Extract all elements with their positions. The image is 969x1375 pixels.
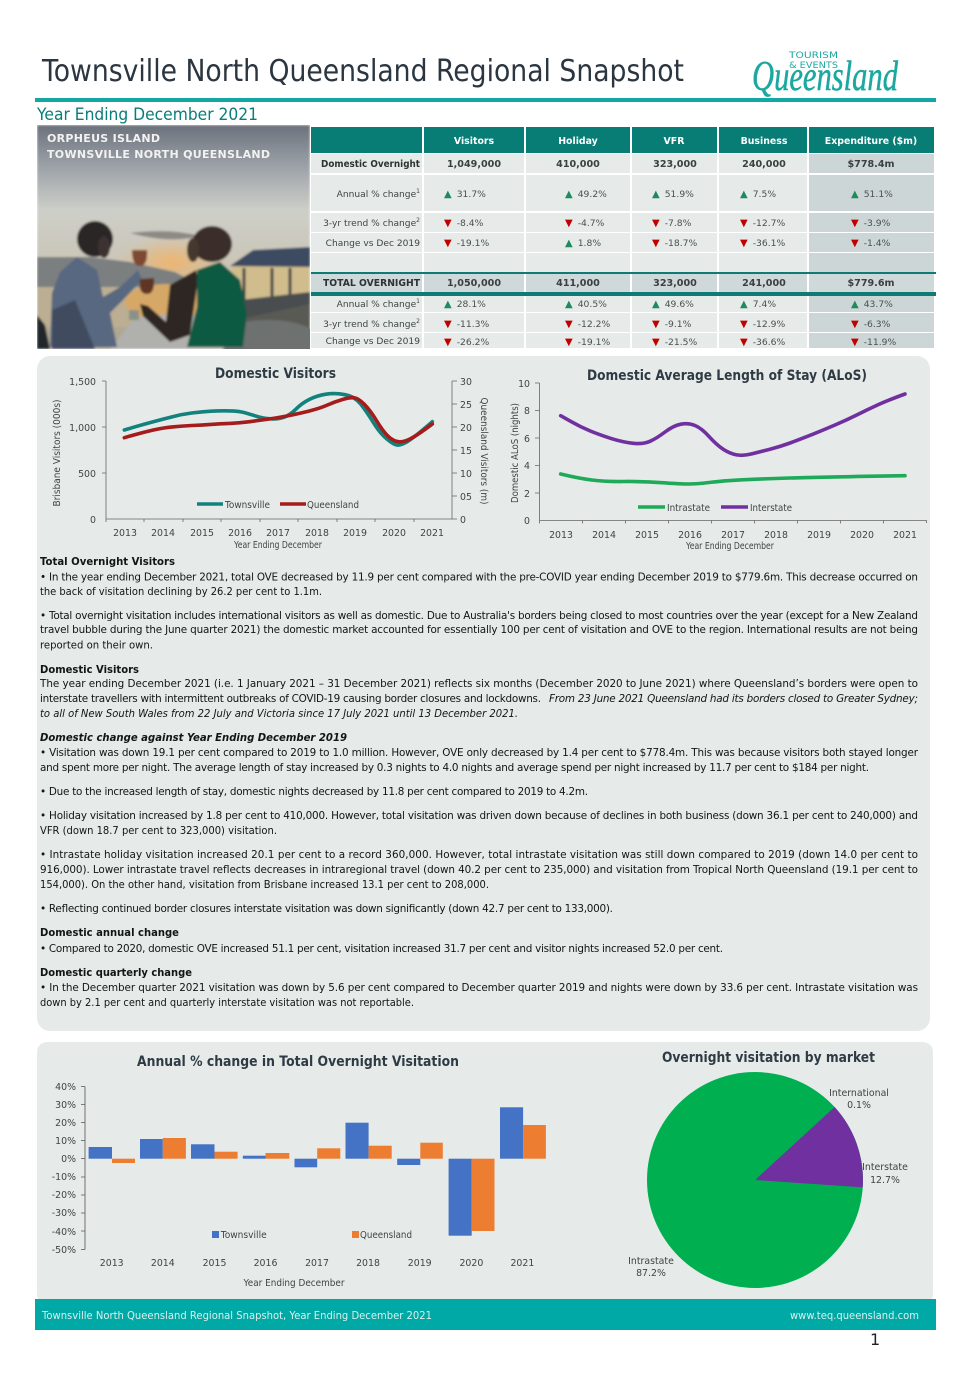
table cell backgrounds <box>311 154 934 348</box>
row: Domestic change vs Dec 2019 <box>326 238 891 249</box>
text block: Domestic change against Year Ending December 2019: VFR (down 18.7 per cent to 323,000) visitation. <box>40 825 277 837</box>
row: Total 3-yr trend: ▼ -11.3% <box>444 319 489 330</box>
line chart: Domestic Average Length of Stay <box>510 368 926 552</box>
line chart: Domestic Visitors: 05 <box>460 492 472 503</box>
text block: Total Overnight Visitors: • In the year ending December 2021, total OVE decreased by 11.9 per cent compared with the pre-COVID year ending December 2019 to $779.6m. This decrease occurred on <box>40 572 918 584</box>
pie labels: International <box>829 1088 889 1099</box>
bar chart: Annual % change in Total Overnight Visitation: 2021 <box>510 1258 534 1269</box>
row: Total annual % change: ▲ 49.6% <box>652 299 694 310</box>
row: Total change vs Dec 2019: ▼ -36.6% <box>740 337 785 348</box>
row: Domestic 3-yr trend: ▼ -7.8% <box>652 218 692 229</box>
row: Domestic annual % change: ▲ 31.7% <box>444 189 486 200</box>
line chart: Domestic Visitors: 20 <box>460 423 472 434</box>
line chart: Domestic Average Length of Stay: Year Ending December <box>685 541 774 552</box>
pie labels: Interstate <box>862 1162 908 1173</box>
panel: charts and commentary <box>37 356 930 1031</box>
line chart: Domestic Visitors: 500 <box>78 469 96 480</box>
text block: Total Overnight Visitors: the back of visitation declining by 26.2 per cent to 1.1m. <box>40 586 322 598</box>
row: Total change vs Dec 2019: Change vs Dec 2019 <box>326 337 420 347</box>
pie labels <box>628 1088 908 1279</box>
logo: Tourism & Events Queensland: & EVENTS <box>789 61 838 71</box>
text block: Domestic Visitors: The year ending December 2021 (i.e. 1 January 2021 – 31 December 2021) reflects six months (December 2020 to June 2021) where Queensland’s borders were open to <box>39 678 918 690</box>
line chart: Domestic Average Length of Stay: 10 <box>518 379 530 390</box>
text block: Total Overnight Visitors <box>40 556 918 652</box>
bar chart: Annual % change in Total Overnight Visitation: 2015 <box>203 1258 226 1269</box>
row: Total Overnight: 411,000 <box>556 278 600 289</box>
legend <box>638 503 792 514</box>
text block: Total Overnight Visitors: • Total overnight visitation includes international visitors as well as domestic. Due to Australia's borders being closed to most countries over the year (except for a New Zealand <box>40 610 918 622</box>
bar chart: Annual % change in Total Overnight Visitation: -20% <box>52 1190 76 1201</box>
bar chart: Annual % change in Total Overnight Visitation: -30% <box>52 1208 76 1219</box>
row: Total Overnight: 241,000 <box>742 278 786 289</box>
line chart: Domestic Visitors: 2016 <box>228 528 252 539</box>
row: Domestic Overnight: 240,000 <box>742 159 786 170</box>
line chart: Domestic Visitors: 1,000 <box>69 423 96 434</box>
line chart: Domestic Average Length of Stay: 2013 <box>549 530 573 541</box>
bar chart: Annual % change in Total Overnight Visitation: 2018 <box>356 1258 380 1269</box>
row: Total change vs Dec 2019 <box>326 337 896 348</box>
row: Total Overnight <box>323 278 895 289</box>
footer bar: www.teq.queensland.com <box>790 1310 919 1322</box>
text block: Domestic Visitors <box>39 664 918 720</box>
photo caption: ORPHEUS ISLAND <box>47 132 160 145</box>
row: Total 3-yr trend <box>323 318 891 330</box>
row: Total annual % change: 1 <box>416 298 420 305</box>
line chart: Domestic Visitors: 10 <box>460 469 472 480</box>
line chart: Domestic Visitors: 2014 <box>151 528 175 539</box>
photo: couple toasting at Orpheus Island <box>37 125 320 360</box>
photo caption <box>47 134 270 160</box>
row: Domestic change vs Dec 2019: Change vs Dec 2019 <box>326 239 420 249</box>
legend: Townsville <box>220 1230 267 1241</box>
bar chart: Annual % change in Total Overnight Visitation: Annual % change in Total Overnight Visitation <box>137 1054 459 1070</box>
line chart: Domestic Average Length of Stay: 6 <box>524 434 530 445</box>
bar chart: Annual % change in Total Overnight Visitation: 2016 <box>254 1258 277 1269</box>
legend <box>197 500 359 511</box>
row: Domestic Overnight: 1,049,000 <box>447 159 501 170</box>
line chart: Domestic Average Length of Stay: 4 <box>524 461 530 472</box>
pie chart: Overnight visitation by market: Overnight visitation by market <box>662 1050 875 1066</box>
row: Total annual % change: ▲ 40.5% <box>565 299 607 310</box>
panel: bottom charts <box>37 1042 933 1304</box>
text block: Domestic Visitors: Domestic Visitors <box>40 664 139 676</box>
row: Domestic Overnight: $778.4m <box>847 159 895 170</box>
line chart: Domestic Visitors: Queensland Visitors (m) <box>478 398 489 504</box>
row: Domestic Overnight: Domestic Overnight <box>321 159 420 170</box>
bar chart: Annual % change in Total Overnight Visitation: -40% <box>52 1227 76 1238</box>
table header row: Business <box>741 136 788 147</box>
table header row: Visitors <box>454 136 495 147</box>
row: Domestic annual % change: ▲ 7.5% <box>740 189 776 200</box>
text block: Domestic change against Year Ending December 2019: • Intrastate holiday visitation increased 20.1 per cent to a record 360,000. However, total intrastate visitation was still down compared to 2019 (down 14.0 per cent to <box>40 849 918 861</box>
row: Total 3-yr trend: 2 <box>416 318 420 325</box>
row: Total Overnight: TOTAL OVERNIGHT <box>323 278 421 289</box>
row: Domestic change vs Dec 2019: ▼ -19.1% <box>444 238 489 249</box>
line chart: Domestic Visitors: 2018 <box>305 528 329 539</box>
text block: Domestic quarterly change: • In the December quarter 2021 visitation was down by 5.6 per cent compared to December quarter 2019 and nights were down by 33.6 per cent. Intrastate visitation was <box>40 982 918 994</box>
table header row <box>311 127 934 153</box>
row: Domestic 3-yr trend: 2 <box>416 217 420 224</box>
text block: Domestic annual change <box>40 927 723 955</box>
line chart: Domestic Visitors: Domestic Visitors <box>215 366 336 382</box>
logo: Tourism & Events Queensland: Queensland <box>752 54 899 100</box>
row: Domestic change vs Dec 2019: ▲ 1.8% <box>565 238 601 249</box>
row: Total change vs Dec 2019: ▼ -26.2% <box>444 337 489 348</box>
row: Domestic Overnight: 323,000 <box>653 159 697 170</box>
bar chart: Annual % change in Total Overnight Visitation: 20% <box>55 1118 76 1129</box>
text block: Domestic change against Year Ending December 2019: 154,000). On the other hand, visitation from Brisbane increased 13.1 per cent to 208,000. <box>40 879 489 891</box>
line chart: Domestic Visitors: Brisbane Visitors (000s) <box>52 400 63 506</box>
bar chart: Annual % change in Total Overnight Visitation: 10% <box>55 1136 76 1147</box>
line chart: Domestic Average Length of Stay: 2019 <box>807 530 831 541</box>
bar chart: Annual % change in Total Overnight Visitation <box>52 1054 546 1289</box>
line chart: Domestic Average Length of Stay: Domestic Average Length of Stay (ALoS) <box>587 368 867 384</box>
text block: Domestic annual change: • Compared to 2020, domestic OVE increased 51.1 per cent, visitation increased 31.7 per cent and visitor nights increased 52.0 per cent. <box>40 943 723 955</box>
line chart: Domestic Average Length of Stay: 2020 <box>850 530 874 541</box>
row: Domestic annual % change: 1 <box>416 188 420 195</box>
row: Total annual % change: Annual % change <box>337 300 416 310</box>
text block: Domestic quarterly change <box>40 967 918 1009</box>
bar chart: Annual % change in Total Overnight Visitation: 2013 <box>100 1258 124 1269</box>
row: Domestic change vs Dec 2019: ▼ -1.4% <box>851 238 891 249</box>
text block: Total Overnight Visitors: reported on their own. <box>40 640 153 652</box>
line chart: Domestic Average Length of Stay: 2014 <box>592 530 616 541</box>
line chart: Domestic Visitors: 2021 <box>420 528 444 539</box>
row: Domestic annual % change: ▲ 51.1% <box>851 189 893 200</box>
table: key visitor statistics <box>311 127 936 348</box>
legend: Interstate <box>750 503 792 514</box>
bar chart: Annual % change in Total Overnight Visitation: 40% <box>55 1082 76 1093</box>
line chart: Domestic Visitors: 2015 <box>190 528 214 539</box>
text block: Domestic quarterly change: down by 2.1 per cent and quarterly interstate visitation was not reportable. <box>40 997 414 1009</box>
text block: Domestic change against Year Ending December 2019: 916,000). Lower intrastate travel reflects decreases in intraregional travel (down 40.2 per cent to 235,000) and visitation from Tropical North Queensland (19.1 per cent to <box>40 864 918 876</box>
pie labels: Intrastate <box>628 1256 674 1267</box>
text block: Domestic Visitors: From 23 June 2021 Queensland had its borders closed to Greater Sydney; <box>549 693 918 705</box>
bar chart: Annual % change in Total Overnight Visitation: -50% <box>52 1245 76 1256</box>
line chart: Domestic Average Length of Stay: 2016 <box>678 530 702 541</box>
bars: Queensland <box>112 1125 546 1231</box>
row: Total change vs Dec 2019: ▼ -11.9% <box>851 337 896 348</box>
text block: Domestic change against Year Ending December 2019 <box>40 732 919 915</box>
row: Total annual % change: ▲ 28.1% <box>444 299 486 310</box>
bars: Townsville <box>89 1107 523 1236</box>
line chart: Domestic Visitors: 0 <box>460 515 466 526</box>
legend: Queensland <box>360 1230 412 1241</box>
bar chart: Annual % change in Total Overnight Visitation: -10% <box>52 1172 76 1183</box>
bar chart: Annual % change in Total Overnight Visitation: 2020 <box>459 1258 483 1269</box>
pie labels: 12.7% <box>870 1175 900 1186</box>
text block: Domestic Visitors: to all of New South Wales from 22 July and Victoria since 17 July 2021 until 13 December 2021. <box>40 708 518 720</box>
bar chart: Annual % change in Total Overnight Visitation: 2014 <box>151 1258 175 1269</box>
row: Domestic 3-yr trend: ▼ -8.4% <box>444 218 484 229</box>
row: Total annual % change: ▲ 43.7% <box>851 299 893 310</box>
page number: 1 <box>870 1330 880 1349</box>
row: Total Overnight: 1,050,000 <box>447 278 501 289</box>
row: Domestic Overnight: 410,000 <box>556 159 600 170</box>
line chart: Domestic Visitors: 15 <box>460 446 472 457</box>
pie labels: 0.1% <box>847 1100 871 1111</box>
table header row: Holiday <box>558 136 598 147</box>
row: Total 3-yr trend: ▼ -12.2% <box>565 319 610 330</box>
footer bar <box>35 1299 936 1330</box>
table header row: Expenditure ($m) <box>825 136 917 147</box>
pie labels: 87.2% <box>636 1268 666 1279</box>
line chart: Domestic Visitors: Year Ending December <box>233 540 322 551</box>
line chart: Domestic Visitors: 2013 <box>113 528 137 539</box>
line chart: Domestic Average Length of Stay: 2021 <box>893 530 917 541</box>
row: Total annual % change <box>337 298 893 310</box>
row: Total change vs Dec 2019: ▼ -21.5% <box>652 337 697 348</box>
text block: Total Overnight Visitors: travel bubble during the June quarter 2021) the domestic market accounted for essentially 100 per cent of visitation and OVE to the region. International results are not being <box>40 624 918 636</box>
row: Domestic 3-yr trend: ▼ -12.7% <box>740 218 785 229</box>
line chart: Domestic Average Length of Stay: Domestic ALoS (nights) <box>510 403 521 503</box>
line chart: Domestic Visitors: 1,500 <box>69 377 96 388</box>
line chart: Domestic Visitors: 2020 <box>382 528 406 539</box>
line chart: Domestic Average Length of Stay: 2 <box>524 489 530 500</box>
text block: Domestic change against Year Ending December 2019: • Holiday visitation increased by 1.8 per cent to 410,000. However, total visitation was driven down because of declines in both business (down 36.1 per cent to 240,000) and <box>40 810 918 822</box>
bar chart: Annual % change in Total Overnight Visitation: Year Ending December <box>243 1278 345 1289</box>
text block: Domestic annual change: Domestic annual change <box>40 927 179 939</box>
row: Domestic Overnight <box>321 159 895 170</box>
row: Domestic change vs Dec 2019: ▼ -36.1% <box>740 238 785 249</box>
legend: Intrastate <box>667 503 710 514</box>
bar chart: Annual % change in Total Overnight Visitation: 2017 <box>305 1258 329 1269</box>
line chart: Domestic Average Length of Stay: 0 <box>524 516 530 527</box>
row: Total Overnight: 323,000 <box>653 278 697 289</box>
line chart: Domestic Average Length of Stay: 2018 <box>764 530 788 541</box>
legend: Queensland <box>307 500 359 511</box>
row: Total 3-yr trend: ▼ -12.9% <box>740 319 785 330</box>
logo: Tourism & Events Queensland: TOURISM <box>788 51 838 61</box>
title: Townsville North Queensland Regional Snapshot <box>41 54 684 89</box>
row: Total annual % change: ▲ 7.4% <box>740 299 776 310</box>
bar chart: Annual % change in Total Overnight Visitation: 0% <box>61 1154 76 1165</box>
row: Domestic 3-yr trend: ▼ -4.7% <box>565 218 605 229</box>
photo caption: TOWNSVILLE NORTH QUEENSLAND <box>47 148 270 161</box>
text block: Domestic change against Year Ending December 2019: and spent more per night. The average length of stay increased by 0.3 nights to 4.0 nights and average spend per night increased by 11.7 per cent to $184 per night. <box>40 762 869 774</box>
text block: Domestic change against Year Ending December 2019: Domestic change against Year Ending December 2019 <box>40 732 347 744</box>
legend <box>212 1230 412 1241</box>
row: Domestic 3-yr trend <box>323 217 891 229</box>
row: Total Overnight: $779.6m <box>847 278 895 289</box>
pie chart: Overnight visitation by market <box>628 1050 908 1288</box>
text block: Total Overnight Visitors: Total Overnight Visitors <box>40 556 175 568</box>
subtitle: Year Ending December 2021 <box>36 105 258 124</box>
text block: Domestic quarterly change: Domestic quarterly change <box>40 967 192 979</box>
row: Total 3-yr trend: 3-yr trend % change <box>323 320 416 330</box>
footer bar: Townsville North Queensland Regional Snapshot, Year Ending December 2021 <box>41 1310 432 1322</box>
line chart: Domestic Average Length of Stay: 8 <box>524 406 530 417</box>
line chart: Domestic Visitors: 2019 <box>343 528 367 539</box>
line chart: Domestic Visitors: 25 <box>460 400 472 411</box>
row: Domestic annual % change <box>337 188 893 200</box>
legend: Townsville <box>224 500 270 511</box>
line chart: Domestic Average Length of Stay: 2015 <box>635 530 659 541</box>
text block: Domestic change against Year Ending December 2019: • Due to the increased length of stay, domestic nights decreased by 11.8 per cent compared to 2019 to 4.2m. <box>40 786 588 798</box>
text block: Domestic change against Year Ending December 2019: • Visitation was down 19.1 per cent compared to 2019 to 1.0 million. However, OVE only decreased by 1.4 per cent to $778.4m. This was because visitors both stayed longer <box>40 747 919 759</box>
text block: Domestic Visitors: interstate travellers with intermittent outbreaks of COVID-19 causing border closures and lockdowns. <box>40 693 541 705</box>
line chart: Domestic Visitors: 2017 <box>266 528 290 539</box>
row: Total 3-yr trend: ▼ -6.3% <box>851 319 891 330</box>
table header row: VFR <box>664 136 685 147</box>
row: Domestic 3-yr trend: 3-yr trend % change <box>323 219 416 229</box>
line chart: Domestic Visitors: 30 <box>460 377 472 388</box>
row: Domestic change vs Dec 2019: ▼ -18.7% <box>652 238 697 249</box>
line chart: Domestic Visitors <box>52 366 489 551</box>
row: Total change vs Dec 2019: ▼ -19.1% <box>565 337 610 348</box>
row: Domestic 3-yr trend: ▼ -3.9% <box>851 218 891 229</box>
text block: Domestic change against Year Ending December 2019: • Reflecting continued border closures interstate visitation was down significantly (down 42.7 per cent to 133,000). <box>40 903 613 915</box>
logo: Tourism & Events Queensland <box>752 51 899 100</box>
bar chart: Annual % change in Total Overnight Visitation: 2019 <box>408 1258 432 1269</box>
row: Domestic annual % change: ▲ 49.2% <box>565 189 607 200</box>
row: Total 3-yr trend: ▼ -9.1% <box>652 319 692 330</box>
line chart: Domestic Visitors: 0 <box>90 515 96 526</box>
row: Domestic annual % change: ▲ 51.9% <box>652 189 694 200</box>
line chart: Domestic Average Length of Stay: 2017 <box>721 530 745 541</box>
bar chart: Annual % change in Total Overnight Visitation: 30% <box>55 1100 76 1111</box>
header rule <box>35 98 936 102</box>
row: Domestic annual % change: Annual % change <box>337 190 416 200</box>
